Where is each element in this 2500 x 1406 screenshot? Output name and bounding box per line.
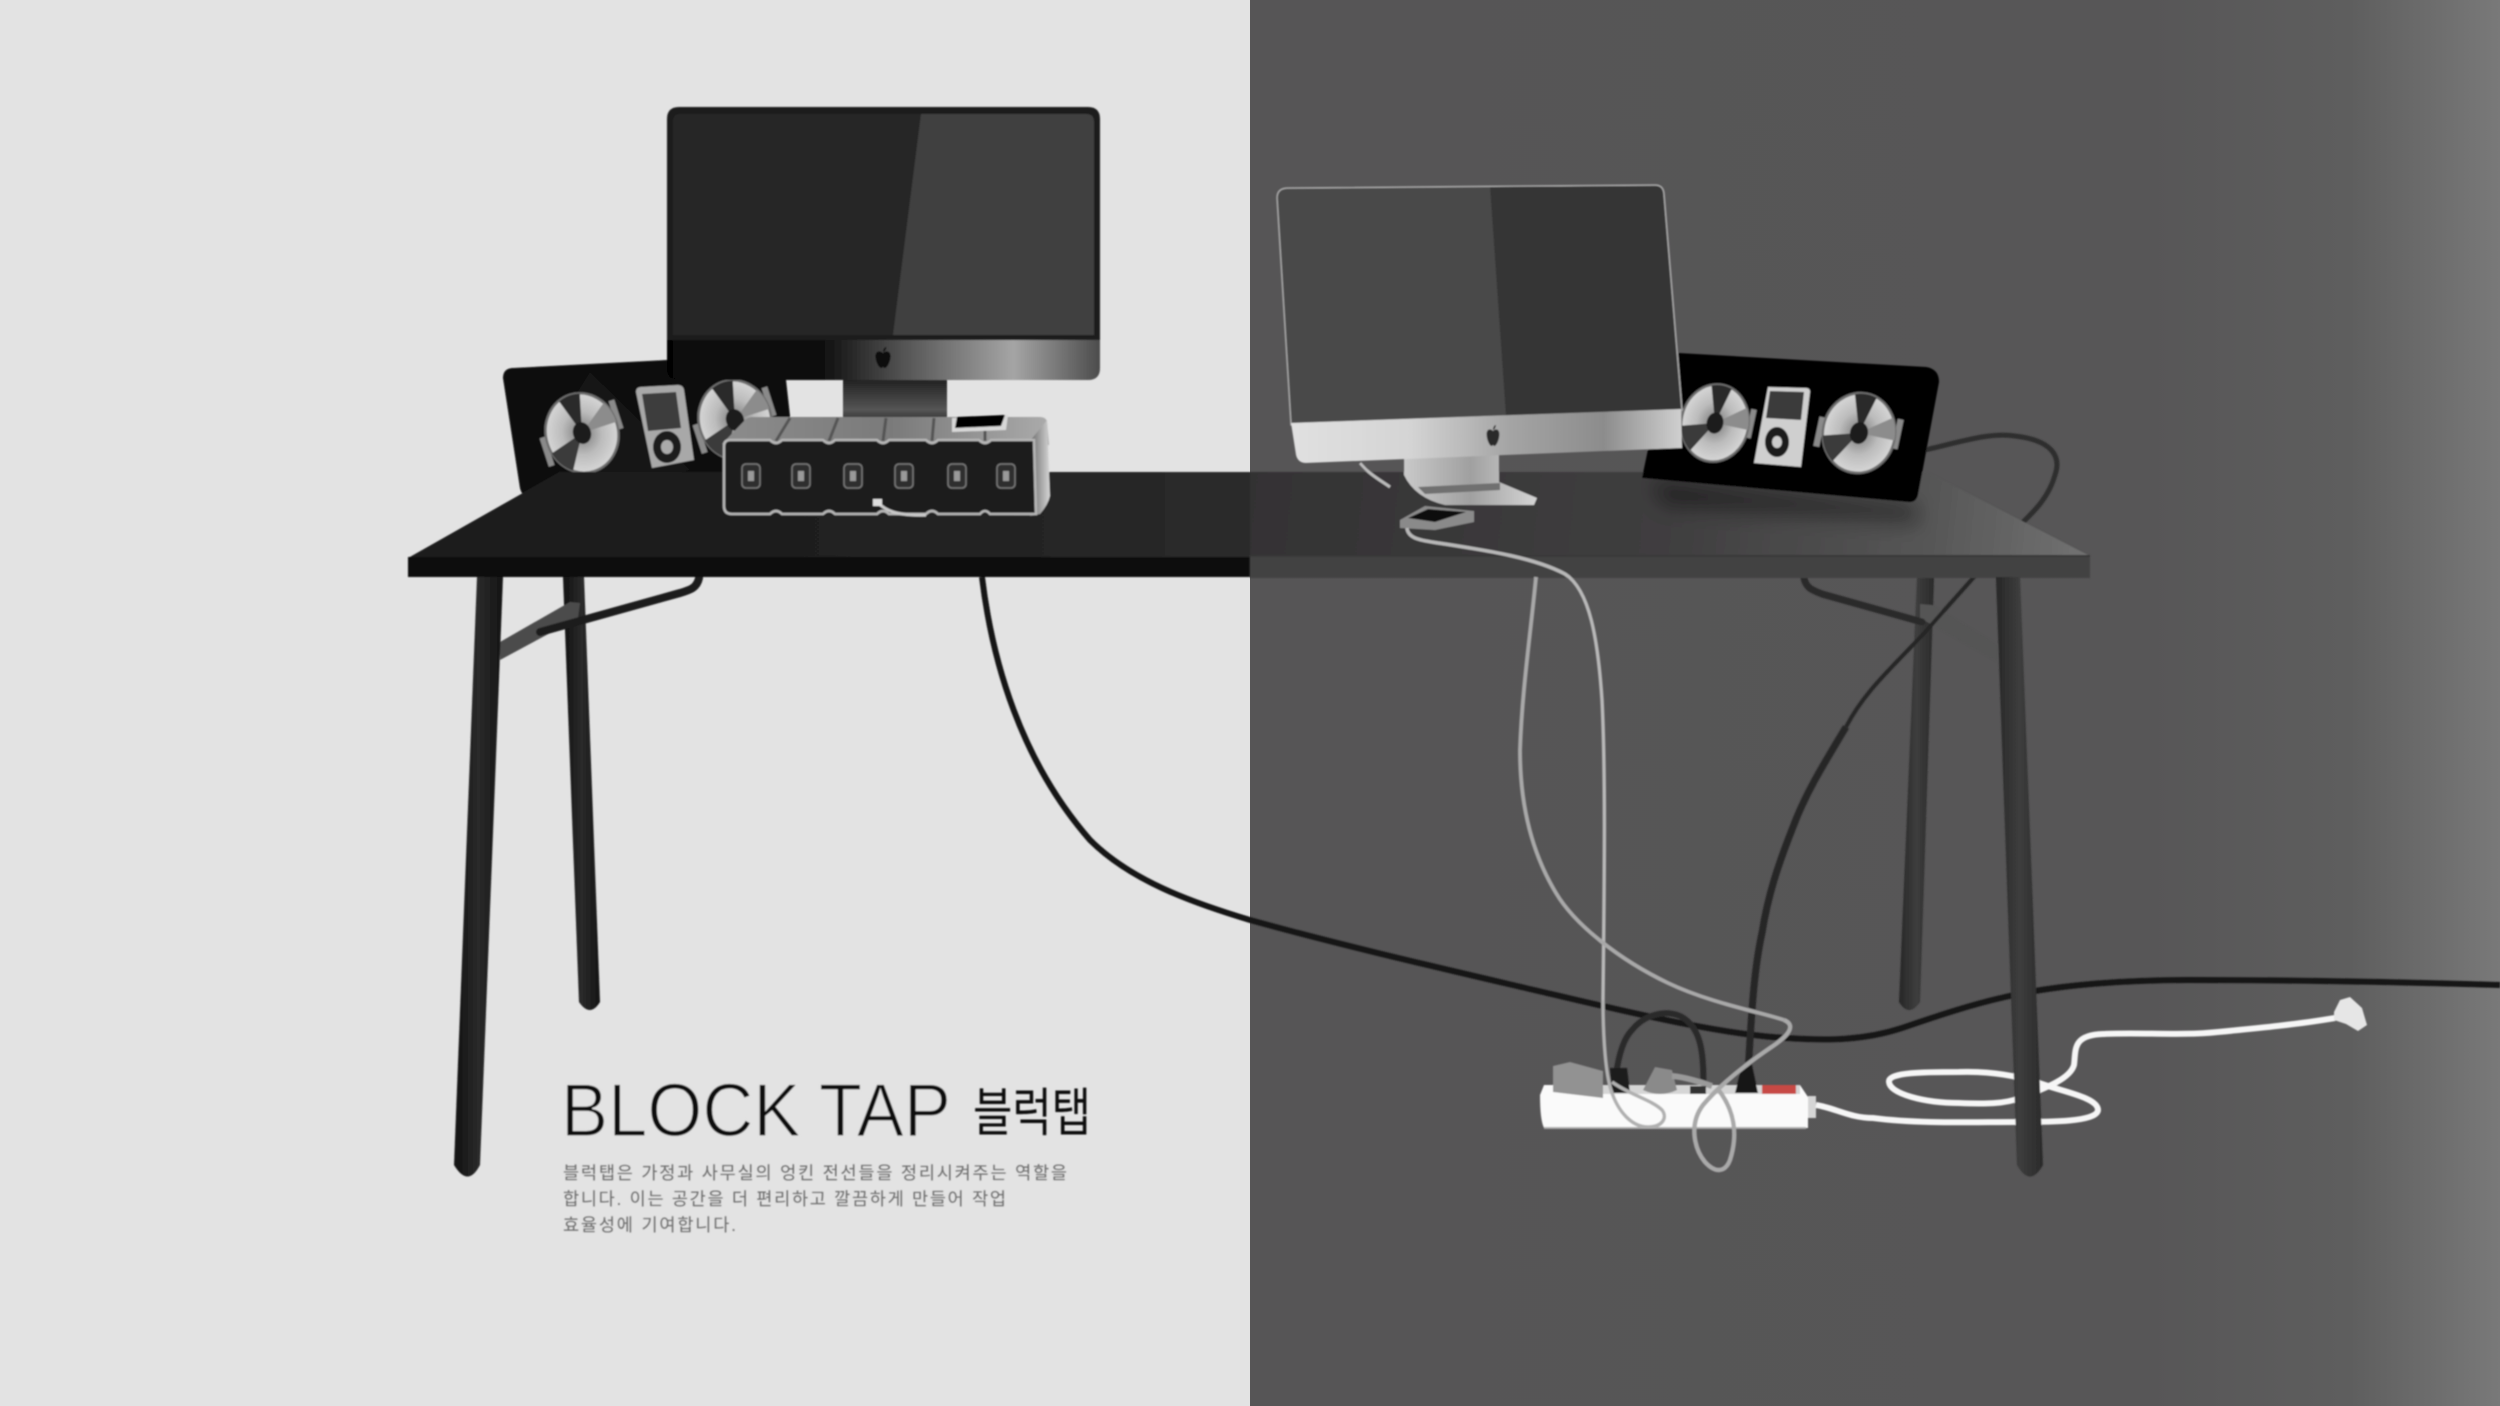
title korean: 블럭탭 xyxy=(973,1085,1091,1143)
front face xyxy=(724,440,1036,514)
left front leg xyxy=(454,577,503,1176)
cable: light cable loop below the strip xyxy=(1694,1020,1790,1170)
right front leg xyxy=(1996,577,2043,1176)
left monitor xyxy=(667,107,1100,430)
table legs and braces behind the top xyxy=(500,577,1998,1010)
right metal brace xyxy=(1804,578,1998,662)
block tap device xyxy=(722,415,1050,516)
table front edge left xyxy=(408,557,1250,577)
title latin: BLOCK TAP xyxy=(561,1068,951,1152)
watch on top xyxy=(952,415,1008,432)
side face xyxy=(1030,420,1050,516)
description text: 블럭탭은 가정과 사무실의 엉킨 전선들을 정리시켜주는 역할을 xyxy=(563,1163,1067,1183)
right rear leg xyxy=(1899,577,1934,1010)
description text: 합니다. 이는 공간을 더 편리하고 깔끔하게 만들어 작업 xyxy=(563,1189,1006,1209)
speaker cone right xyxy=(683,369,786,471)
black plug left xyxy=(1610,1068,1630,1093)
cable: light thin cable loop at the strip xyxy=(1603,1000,1664,1127)
speaker cone left xyxy=(1669,377,1760,469)
table top xyxy=(408,472,2090,578)
table front edge right xyxy=(1250,556,2090,578)
apple logo xyxy=(1487,425,1499,446)
adapter xyxy=(1553,1062,1603,1098)
stand xyxy=(843,378,947,430)
phone on the desk xyxy=(1400,506,1474,530)
top grooves xyxy=(776,418,985,441)
cable: dark speaker cable upper part xyxy=(1846,577,1974,727)
icon: wall plug xyxy=(2334,997,2367,1031)
screen xyxy=(667,107,1100,342)
speaker cone right xyxy=(1810,385,1907,481)
cable: dark speaker cable lower part xyxy=(1748,727,1846,1075)
red switch xyxy=(1762,1085,1796,1094)
chin xyxy=(667,340,1100,380)
speaker cone left xyxy=(530,382,633,484)
screen xyxy=(1277,185,1682,425)
panel: light left background xyxy=(0,0,1250,1406)
apple logo xyxy=(875,347,891,368)
strip body xyxy=(1540,1085,1808,1128)
grey plug xyxy=(1643,1067,1712,1094)
cable: right speaker cable behind table xyxy=(1925,435,2057,577)
black plug right xyxy=(1735,1065,1758,1093)
top face xyxy=(722,417,1049,445)
short white cable xyxy=(877,502,926,515)
cable: dark power cable running across the floor xyxy=(982,577,2500,1039)
chin xyxy=(1291,409,1682,463)
power strip xyxy=(1540,1013,1816,1129)
left metal brace xyxy=(500,578,699,660)
small white lead xyxy=(1360,463,1390,487)
player xyxy=(636,385,694,468)
right speaker with player xyxy=(1642,353,1939,502)
description text: 효율성에 기여합니다. xyxy=(563,1215,736,1235)
table surface left xyxy=(408,472,1250,558)
buttons xyxy=(742,464,1015,488)
scene: desk illustration xyxy=(408,107,2500,1176)
title xyxy=(561,1068,1091,1152)
cable: light thin cable from the phone to the power strip (desk part) xyxy=(1407,528,1604,1000)
cable: white power cord xyxy=(1816,1018,2335,1122)
player xyxy=(1754,387,1810,467)
dark loop cable xyxy=(1616,1013,1703,1095)
table surface right xyxy=(1250,472,2090,556)
right monitor xyxy=(1277,185,1682,505)
left rear leg xyxy=(563,577,600,1010)
left speaker with player xyxy=(503,360,794,497)
description text xyxy=(563,1163,1067,1235)
shadow: right speaker on table xyxy=(1650,482,1918,522)
cable: light cable under the table xyxy=(1520,577,1784,1020)
stand xyxy=(1404,452,1537,505)
panel: dark right background xyxy=(1250,0,2500,1406)
